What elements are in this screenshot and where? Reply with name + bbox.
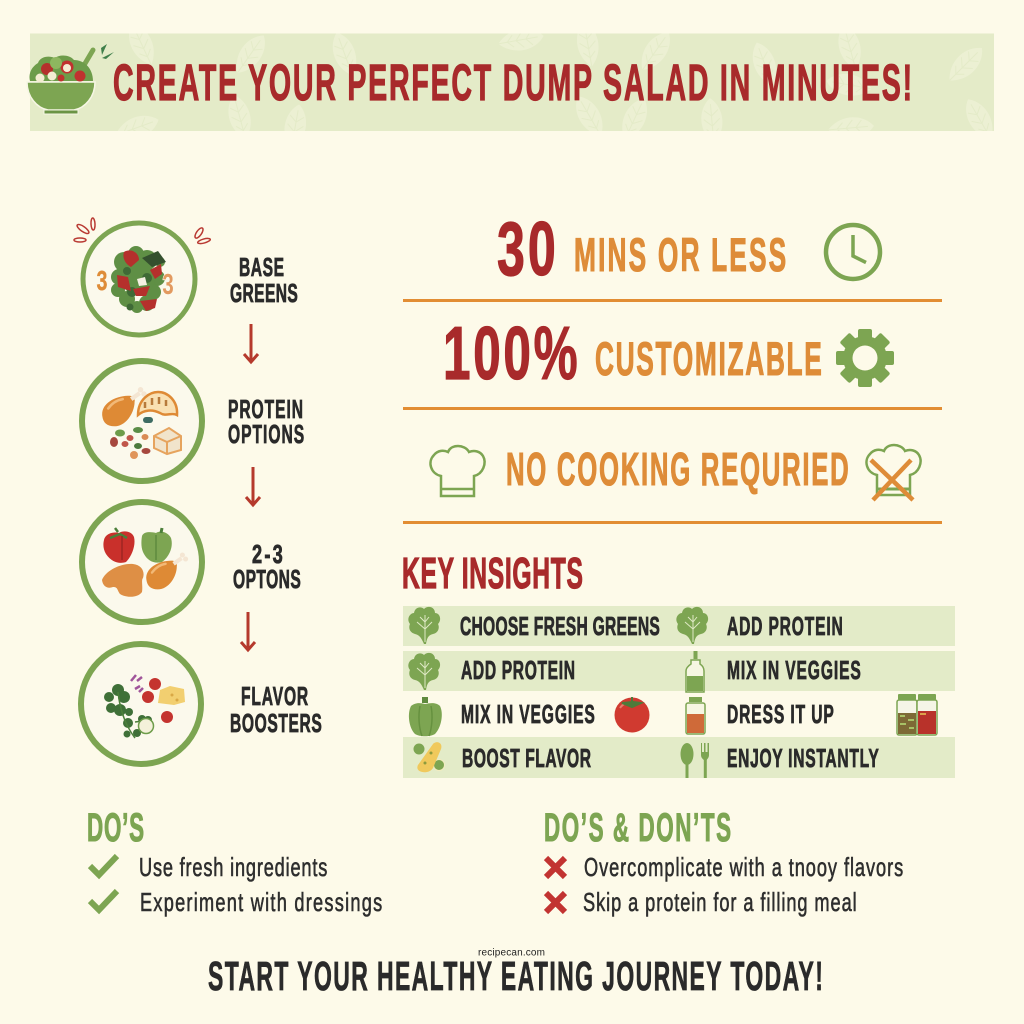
icon: chef hat — [430, 446, 485, 496]
dividers — [403, 299, 942, 524]
label: protein options: OPTIONS — [228, 420, 304, 449]
step 3 circle: vegetable and protein options — [82, 502, 202, 622]
panel: do's and don'ts — [544, 805, 903, 917]
label: flavor boosters: BOOSTERS — [230, 709, 322, 738]
stat: no cooking required: NO COOKING REQURIED — [506, 443, 849, 495]
text: skip a protein: Skip a protein for a filling meal — [583, 888, 857, 917]
text: add protein right: ADD PROTEIN — [727, 612, 843, 641]
arrow 1 — [244, 324, 258, 362]
icon: check 2 — [90, 891, 117, 910]
stat: 100% customizable: 100% — [443, 312, 578, 396]
icon: crossed-out chef hat — [866, 445, 921, 500]
icon: check 1 — [90, 856, 117, 875]
icon: clock — [826, 225, 880, 279]
stat: 100% customizable — [443, 312, 822, 396]
text: use fresh ingredients: Use fresh ingredients — [139, 853, 327, 882]
text: mix in veggies right: MIX IN VEGGIES — [727, 656, 861, 685]
label: flavor boosters: FLAVOR — [241, 682, 309, 711]
icon: cross 1 — [546, 858, 565, 877]
icon: lettuce row 1 left — [408, 607, 440, 644]
sparkle marks — [74, 218, 211, 245]
stat: 30 mins or less: 30 — [497, 207, 556, 292]
arrow 2 — [246, 467, 260, 505]
text: dress it up: DRESS IT UP — [727, 700, 834, 729]
arrow 3 — [241, 612, 255, 650]
panel: do's — [87, 805, 382, 917]
stat: 30 mins or less — [497, 207, 786, 292]
icon: green pepper — [409, 697, 442, 736]
source credit: recipecan.com — [478, 948, 545, 958]
label: protein options: PROTEIN — [228, 395, 303, 424]
text: mix in veggies left: MIX IN VEGGIES — [461, 700, 595, 729]
label: base greens — [230, 253, 298, 308]
row backgrounds — [403, 606, 955, 778]
label: flavor boosters — [230, 682, 322, 738]
panel: ingredient steps — [74, 218, 322, 764]
label: base greens: BASE — [239, 253, 284, 282]
text: overcomplicate: Overcomplicate with a tnooy flavors — [584, 853, 903, 882]
step 2 circle: protein options — [82, 361, 202, 481]
text: add protein left: ADD PROTEIN — [461, 656, 575, 685]
text: experiment with dressings: Experiment with dressings — [140, 888, 382, 917]
step 1 circle: base greens: 3 — [162, 269, 174, 301]
icon: lettuce row 1 right — [676, 607, 708, 644]
footer call to action: START YOUR HEALTHY EATING JOURNEY TODAY! — [208, 954, 823, 1000]
label: base greens: GREENS — [230, 279, 298, 308]
banner background — [30, 34, 994, 131]
heading: do's and don'ts: DO’S & DON’TS — [544, 805, 731, 850]
step 4 circle: flavor boosters — [81, 644, 201, 764]
icon: salad bowl — [27, 44, 114, 114]
label: 2-3 options: OPTONS — [233, 565, 301, 594]
icon: dressing bottle — [686, 651, 704, 692]
icon: cross 2 — [546, 893, 565, 912]
panel: key insights table — [403, 606, 955, 778]
icon: spoon and fork — [680, 743, 709, 778]
stat: 100% customizable: CUSTOMIZABLE — [595, 334, 822, 386]
label: 2-3 options: 2-3 — [252, 540, 283, 569]
heading: key insights: KEY INSIGHTS — [402, 549, 583, 598]
icon: two jars of spices — [897, 694, 937, 735]
text: boost flavor: BOOST FLAVOR — [462, 744, 591, 773]
text: choose fresh greens: CHOOSE FRESH GREENS — [460, 612, 660, 641]
icon: tomato — [614, 697, 650, 732]
icon: lettuce row 2 — [408, 653, 440, 690]
text: enjoy instantly: ENJOY INSTANTLY — [727, 744, 879, 773]
icon: gear — [836, 329, 894, 387]
title: CREATE YOUR PERFECT DUMP SALAD IN MINUTES! — [113, 54, 912, 111]
icon: cheese — [414, 742, 444, 772]
label: protein options — [228, 395, 304, 449]
panel: stats — [403, 207, 942, 524]
stat: 30 mins or less: MINS OR LESS — [574, 230, 786, 282]
step 1 circle: base greens: 3 — [97, 266, 107, 297]
label: 2-3 options — [233, 540, 301, 594]
step 1 circle: base greens — [83, 223, 195, 335]
heading: do's: DO’S — [87, 805, 144, 850]
icon: spice jar — [686, 697, 705, 734]
